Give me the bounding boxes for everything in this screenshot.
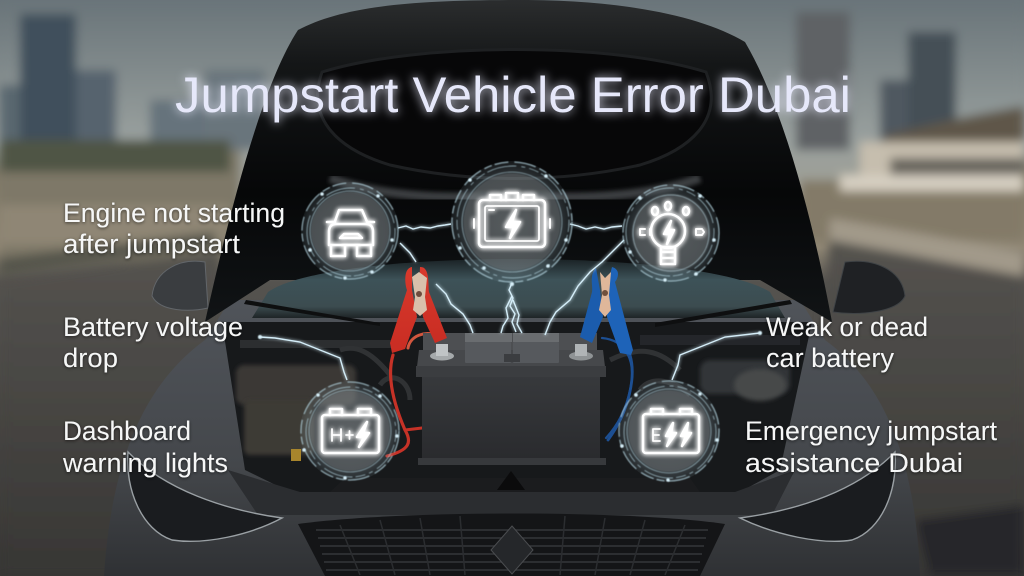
car battery bbox=[416, 333, 606, 465]
label: dashboard warning lights: warning lights bbox=[62, 448, 228, 478]
label: battery voltage drop: drop bbox=[63, 343, 118, 373]
icon: battery (top centre) bbox=[451, 161, 573, 283]
blue clamp bbox=[580, 267, 633, 355]
label: dashboard warning lights: Dashboard bbox=[63, 416, 191, 446]
open hood bbox=[205, 0, 832, 322]
windshield bbox=[252, 259, 785, 318]
label: battery voltage drop: Battery voltage bbox=[63, 312, 243, 342]
title: Jumpstart Vehicle Error Dubai bbox=[175, 67, 851, 123]
icon: bulb bbox=[622, 184, 720, 282]
connector dots bbox=[258, 282, 762, 339]
label: engine not starting bbox=[63, 198, 285, 259]
icon: battery E bbox=[618, 380, 720, 482]
label: weak or dead car battery: Weak or dead bbox=[766, 312, 928, 342]
label: emergency jumpstart assistance: assistance Dubai bbox=[745, 448, 963, 478]
icon: car bbox=[301, 182, 399, 280]
label: engine not starting: Engine not starting bbox=[63, 198, 285, 228]
label: weak or dead car battery: car battery bbox=[766, 343, 894, 373]
label: weak or dead car battery bbox=[766, 312, 928, 373]
jump leads bbox=[387, 334, 632, 456]
car body and fenders bbox=[104, 300, 920, 576]
engine bay bbox=[222, 300, 812, 492]
front bumper and grille bbox=[228, 470, 795, 576]
headlight left bbox=[128, 452, 282, 541]
hood inner panel bbox=[318, 50, 711, 197]
label: emergency jumpstart assistance: Emergency jumpstart bbox=[745, 416, 997, 446]
mirror right bbox=[833, 261, 905, 313]
lightning arcs bbox=[260, 224, 760, 380]
label: emergency jumpstart assistance bbox=[745, 416, 997, 478]
label: engine not starting: after jumpstart bbox=[63, 229, 241, 259]
label: battery voltage drop bbox=[63, 312, 243, 373]
headlight right bbox=[740, 452, 895, 541]
label: dashboard warning lights bbox=[62, 416, 228, 478]
mirror left bbox=[152, 261, 208, 310]
icon: battery H+ bbox=[300, 381, 400, 481]
red clamp bbox=[390, 267, 447, 353]
